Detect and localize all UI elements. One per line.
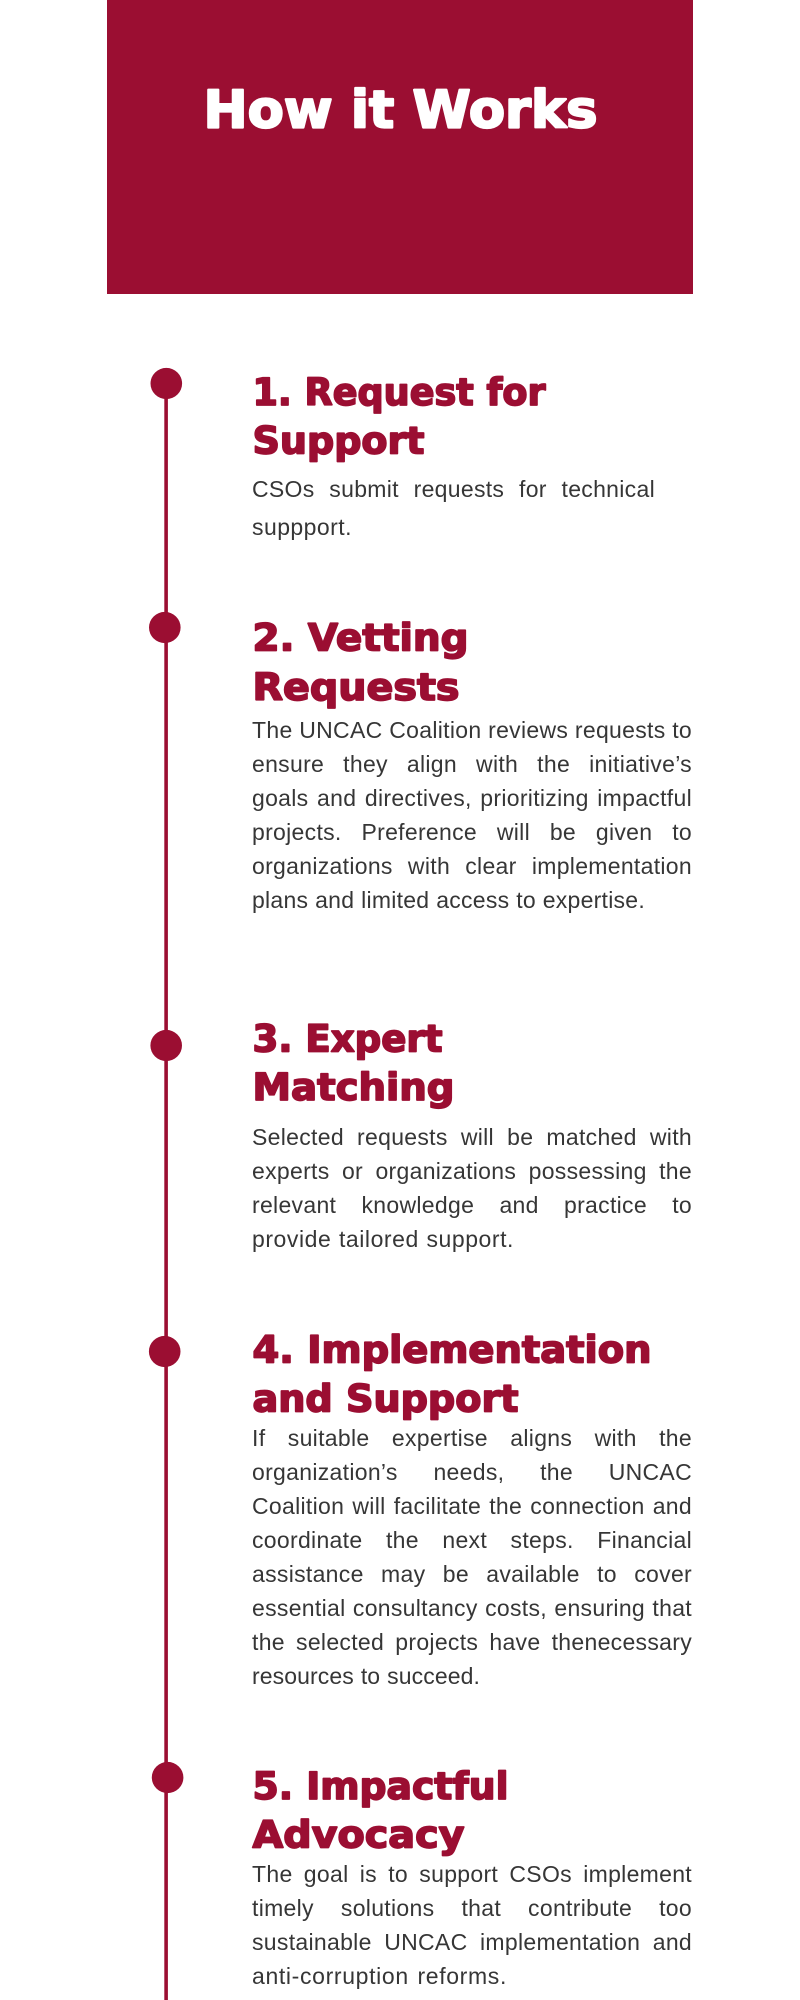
timeline xyxy=(148,368,184,2000)
step 1 xyxy=(252,371,655,540)
step 3 text: provide tailored support. xyxy=(252,1226,514,1252)
marker: step 1 xyxy=(150,368,182,399)
step 5 heading: Advocacy xyxy=(252,1814,464,1857)
marker: step 2 xyxy=(149,612,181,643)
step 3 xyxy=(252,1018,692,1252)
step 4 heading: and Support xyxy=(252,1378,518,1421)
marker: step 4 xyxy=(149,1336,180,1367)
marker: step 3 xyxy=(150,1030,182,1061)
step 4 xyxy=(252,1329,692,1689)
step 5 text xyxy=(252,1861,692,1989)
step 5 xyxy=(252,1765,692,1989)
step 1 text xyxy=(252,476,655,540)
timeline line xyxy=(164,385,168,2000)
step 4 text: assistance may be available to cover xyxy=(252,1561,692,1587)
step 4 heading: 4. Implementation xyxy=(252,1329,652,1372)
step 2 text xyxy=(252,717,692,913)
step 3 heading xyxy=(252,1018,455,1110)
step 3 text: experts or organizations possessing the xyxy=(252,1158,692,1184)
step 4 text: essential consultancy costs, ensuring that xyxy=(252,1595,692,1621)
step 3 text: Selected requests will be matched with xyxy=(252,1124,692,1150)
step 1 text: CSOs submit requests for technical xyxy=(252,476,655,502)
marker: step 5 xyxy=(152,1762,183,1793)
step 4 text: organization’s needs, the UNCAC xyxy=(252,1459,692,1485)
step 3 heading: 3. Expert xyxy=(252,1018,442,1061)
step 3 heading: Matching xyxy=(252,1066,455,1109)
step 5 heading xyxy=(252,1765,508,1857)
step 3 text xyxy=(252,1124,692,1252)
step 5 heading: 5. Impactful xyxy=(252,1765,508,1808)
step 5 text: The goal is to support CSOs implement xyxy=(252,1861,692,1887)
step 1 text: suppport. xyxy=(252,514,352,540)
step 4 text: If suitable expertise aligns with the xyxy=(252,1425,692,1451)
step 1 heading: 1. Request for xyxy=(252,371,546,414)
step 2 text: plans and limited access to expertise. xyxy=(252,887,645,913)
step 2 text: organizations with clear implementation xyxy=(252,853,692,879)
step 2 text: goals and directives, prioritizing impactful xyxy=(252,785,692,811)
step 4 text xyxy=(252,1425,692,1689)
title: How it Works xyxy=(204,80,598,140)
step 5 text: timely solutions that contribute too xyxy=(252,1895,692,1921)
step 2 text: projects. Preference will be given to xyxy=(252,819,692,845)
step 2 heading: 2. Vetting xyxy=(252,617,468,660)
step 1 heading xyxy=(252,371,546,462)
step 1 heading: Support xyxy=(252,420,424,462)
step 4 heading xyxy=(252,1329,652,1421)
step 4 text: the selected projects have thenecessary xyxy=(252,1629,692,1655)
step 4 text: resources to succeed. xyxy=(252,1663,480,1689)
step 5 text: sustainable UNCAC implementation and xyxy=(252,1929,692,1955)
step 4 text: Coalition will facilitate the connection and xyxy=(252,1493,692,1519)
step 2 text: The UNCAC Coalition reviews requests to xyxy=(252,717,692,743)
step 5 text: anti-corruption reforms. xyxy=(252,1963,507,1989)
step 3 text: relevant knowledge and practice to xyxy=(252,1192,692,1218)
step 2 heading: Requests xyxy=(252,666,460,709)
step 4 text: coordinate the next steps. Financial xyxy=(252,1527,692,1553)
step 2 heading xyxy=(252,617,468,709)
header banner xyxy=(107,0,693,294)
step 2 text: ensure they align with the initiative’s xyxy=(252,751,692,777)
step 2 xyxy=(252,617,692,913)
